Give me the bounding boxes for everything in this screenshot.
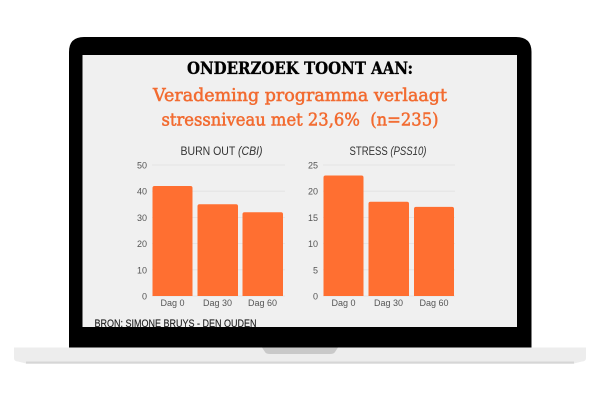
x axis labels: Dag 60: [248, 298, 277, 308]
y axis labels: 40: [137, 187, 147, 197]
y axis labels: 0: [313, 292, 318, 302]
y axis labels: 10: [137, 265, 147, 275]
x axis labels: Dag 0: [160, 298, 185, 308]
y axis labels: 20: [308, 187, 318, 197]
y axis labels: 5: [313, 265, 318, 275]
screen panel: [82, 55, 517, 330]
x axis labels: Dag 30: [203, 298, 232, 308]
y axis labels: 0: [142, 292, 147, 302]
subtitle: stressniveau met 23,6% (n=235): [162, 110, 438, 130]
source note: BRON: SIMONE BRUYS - DEN OUDEN: [94, 318, 257, 330]
x axis labels: Dag 60: [419, 298, 449, 308]
y axis labels: [308, 160, 318, 302]
y axis labels: [137, 160, 147, 302]
subtitle: [152, 85, 448, 130]
bars: [324, 176, 454, 296]
bars: [152, 186, 283, 296]
y axis labels: 30: [137, 213, 147, 223]
y axis labels: 10: [308, 239, 318, 249]
x axis labels: Dag 30: [374, 298, 403, 308]
y axis labels: 20: [137, 239, 147, 249]
x axis labels: [160, 298, 277, 308]
chart: burn out: [137, 146, 285, 308]
y axis labels: 25: [308, 160, 318, 170]
laptop base: [14, 348, 586, 364]
y axis labels: 50: [137, 160, 147, 170]
x axis labels: Dag 0: [331, 298, 356, 308]
laptop bezel: [69, 37, 532, 348]
subtitle: Verademing programma verlaagt: [152, 85, 448, 106]
x axis labels: [331, 298, 449, 308]
chart title: stress: STRESS (PSS10): [350, 146, 427, 158]
y axis labels: 15: [308, 213, 318, 223]
chart title: burn out: BURN OUT (CBI): [180, 146, 263, 158]
title: ONDERZOEK TOONT AAN:: [187, 59, 413, 79]
chart: stress: [308, 146, 455, 308]
